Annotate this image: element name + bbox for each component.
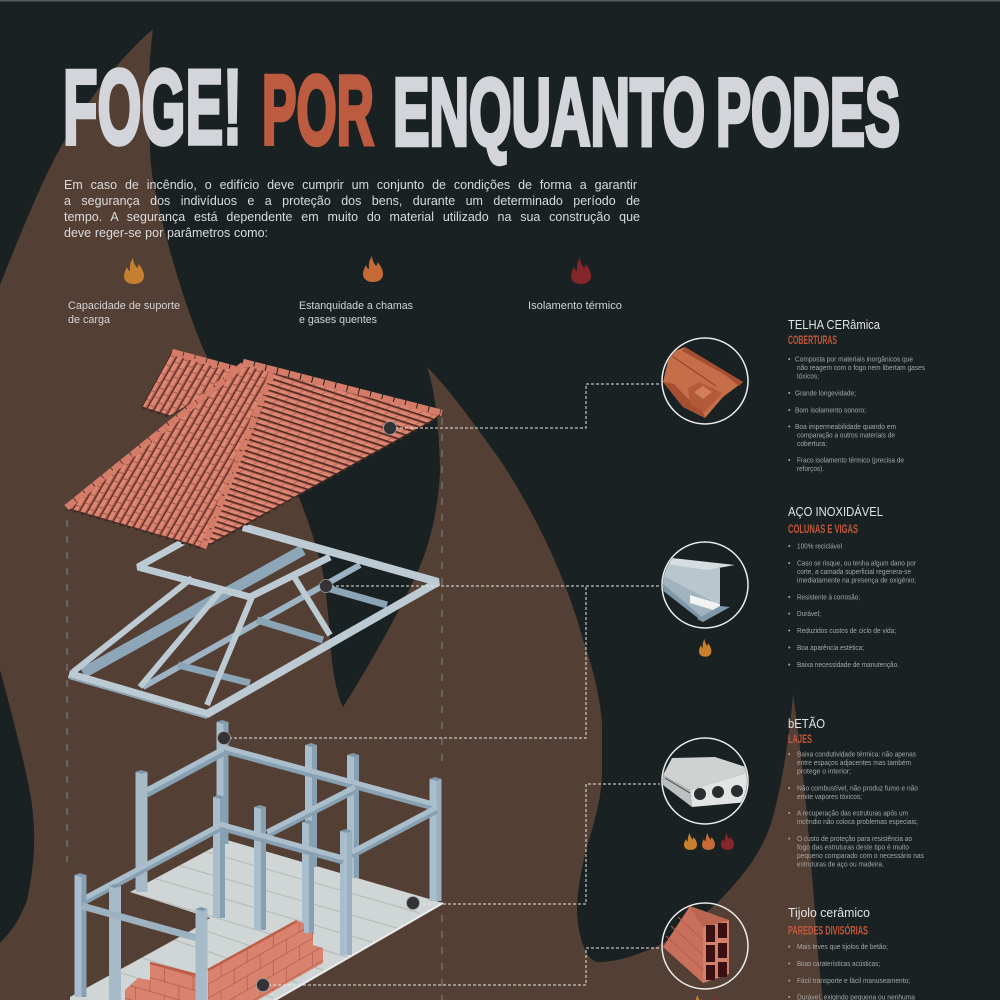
marker dots <box>218 422 420 992</box>
title <box>63 48 900 166</box>
bullet list: aco: 100% reciclável <box>797 544 842 550</box>
heading: tijolo: Tijolo cerâmico <box>788 905 870 920</box>
bullet list: telha: • <box>788 356 791 364</box>
middle steel beams <box>85 824 343 902</box>
bullet list: telha: comparação a outros materiais de <box>797 432 895 440</box>
icon: insulation flame <box>571 258 591 284</box>
bullet list: telha: Bom isolamento sonoro; <box>795 408 866 414</box>
bullet list: aco: Caso se risque, ou tenha algum dano por <box>797 560 917 568</box>
back steel beams <box>147 747 437 856</box>
bullet list: aco: • <box>788 645 791 652</box>
bullet list: telha: • <box>788 408 791 414</box>
frame: sloping legs <box>73 575 330 705</box>
bullet list: betao: incêndio não coloca problemas especiais; <box>797 819 918 826</box>
bullet list: betao <box>788 752 924 868</box>
icon: flame tightness flame <box>363 256 383 282</box>
bullet list: betao: protege o interior; <box>797 768 851 776</box>
circle: steel I-beam <box>660 542 748 628</box>
bullet list: aco: imediatamente na presença de oxigénio; <box>797 578 916 584</box>
connector lines <box>224 384 660 985</box>
bullet list: telha: não reagem com o fogo nem libertam gases <box>797 365 925 372</box>
guide lines: vertical dashes <box>67 418 442 1000</box>
bullet list: betao: Baixa condutividade térmica: não apenas <box>797 752 916 758</box>
brick wall: right face <box>208 921 323 1000</box>
circle: ceramic brick <box>662 903 748 989</box>
frame: upper rectangle <box>138 542 330 597</box>
bullet list: betao: emite vapores tóxicos; <box>797 794 862 801</box>
left rear column <box>136 770 148 892</box>
floor slab <box>70 840 443 1000</box>
subheading: lajes: LAJES <box>788 732 812 746</box>
icons: brick rating flames <box>692 995 722 1000</box>
bullet list: tijolo: • <box>788 961 791 968</box>
bullet list: betao: Não combustível, não produz fumo e não <box>797 786 918 792</box>
bullet list: betao: fogo das estruturas deste tipo é muito <box>797 844 909 852</box>
steel roof frame <box>69 527 438 718</box>
roof: eave teeth <box>66 408 433 549</box>
roof: left slope <box>66 362 272 548</box>
bullet list: aco: Boa aparência estética; <box>797 645 864 652</box>
caption: load capacity: de carga <box>68 314 111 326</box>
bullet list: aco: • <box>788 544 791 550</box>
bullet list: telha <box>788 356 925 473</box>
bullet list: aco: Baixa necessidade de manutenção. <box>797 662 899 669</box>
bullet list: telha: Grande longevidade; <box>795 390 856 398</box>
bullet list: aco: corte, a camada superficial regenera-se <box>797 569 911 576</box>
subheading: coberturas: COBERTURAS <box>788 333 837 347</box>
heading: telha: TELHA CERâmica <box>788 317 881 332</box>
caption: flame tightness: Estanquidade a chamas <box>299 300 413 312</box>
bullet list: telha: Fraco isolamento térmico (precisa de <box>797 458 904 464</box>
bullet list: telha: • <box>788 458 791 464</box>
bullet list: telha: reforços). <box>797 466 824 473</box>
caption: load capacity: Capacidade de suporte <box>68 300 180 312</box>
bullet list: tijolo: Fácil transporte e fácil manuseamento; <box>797 978 910 985</box>
frame: outer base <box>69 527 438 714</box>
icon: load flame <box>124 258 144 284</box>
bullet list: betao: • <box>788 786 791 792</box>
bullet list: tijolo: • <box>788 944 791 951</box>
roof: back slope <box>142 352 243 416</box>
title word: POR: POR <box>262 55 374 165</box>
front steel columns <box>74 873 208 1000</box>
bullet list: betao: O custo de proteção para resistência ao <box>797 836 912 843</box>
ceramic roof <box>66 352 442 549</box>
middle steel columns <box>213 795 352 955</box>
bullet list: tijolo <box>788 944 915 1000</box>
heading: aco: AÇO INOXIDÁVEL <box>788 504 883 519</box>
bullet list: betao: • <box>788 836 791 843</box>
back steel columns <box>216 720 442 901</box>
bullet list: telha: Composta por materiais inorgânicos que <box>795 356 913 364</box>
bullet list: aco: • <box>788 611 791 618</box>
intro paragraph: Em caso de incêndio, o edifício deve cumprir um conjunto de condições de forma a garantir <box>64 178 637 192</box>
bullet list: tijolo: Boas caraterísticas acústicas; <box>797 961 880 968</box>
bullet list: betao: • <box>788 810 791 818</box>
panel: telha ceramica <box>788 317 925 473</box>
bullet list: aco: • <box>788 628 791 635</box>
title word: FOGE!: FOGE! <box>63 48 242 166</box>
panel: betao <box>788 716 924 868</box>
roof: right slope <box>203 373 442 548</box>
circle: ceramic tile <box>662 338 748 424</box>
bullet list: telha: cobertura; <box>797 441 827 448</box>
intro paragraph: deve reger-se por parâmetros como: <box>64 226 268 240</box>
bullet list: aco: • <box>788 560 791 568</box>
heading: betao: bETÃO <box>788 716 825 731</box>
caption: flame tightness: e gases quentes <box>299 314 377 326</box>
circle: concrete slab <box>662 738 749 824</box>
brick wall: left face <box>125 963 197 1000</box>
intro paragraph <box>64 178 640 240</box>
bullet list: telha: Boa impermeabilidade quando em <box>795 424 896 431</box>
intro paragraph: a segurança dos indivíduos e a proteção dos bens, durante um determinado período de <box>64 194 640 208</box>
bullet list: tijolo: • <box>788 978 791 985</box>
icons: concrete rating flames <box>684 833 734 850</box>
bullet list: aco: Reduzidos custos de ciclo de vida; <box>797 628 896 635</box>
title word: ENQUANTO: ENQUANTO <box>393 59 705 166</box>
bullet list: aco: Durável; <box>797 611 821 618</box>
bullet list: aco: Resistente à corrosão; <box>797 594 860 602</box>
brick wall <box>125 921 323 1000</box>
icon: steel rating flame <box>699 639 711 657</box>
caption: thermal insulation: Isolamento térmico <box>528 300 622 312</box>
bullet list: betao: pequeno comparado com o necessário nas <box>797 853 924 860</box>
bullet list: telha: tóxicos; <box>797 374 819 380</box>
bullet list: tijolo: Mais leves que tijolos de betão; <box>797 944 888 951</box>
frame: darker braces <box>83 550 303 673</box>
bullet list: telha: • <box>788 390 791 398</box>
roof: ridge caps <box>66 352 442 548</box>
background flames <box>0 29 823 1000</box>
bullet list: telha: • <box>788 424 791 431</box>
subheading: paredes divisorias: PAREDES DIVISÓRIAS <box>788 922 868 938</box>
bullet list: aco: • <box>788 662 791 669</box>
bullet list: aco: • <box>788 594 791 602</box>
bullet list: betao: A recuperação das estruturas após um <box>797 810 908 818</box>
bullet list: betao: • <box>788 752 791 758</box>
bullet list: betao: estruturas de aço ou madeira. <box>797 862 884 868</box>
subheading: colunas e vigas: COLUNAS E VIGAS <box>788 522 858 536</box>
panel: aco inoxidavel <box>788 504 917 669</box>
bullet list: betao: entre espaços adjacentes mas também <box>797 760 911 767</box>
panel: tijolo ceramico <box>788 905 915 1000</box>
bullet list: aco <box>788 544 917 669</box>
intro paragraph: tempo. A segurança está dependente em muito do material utilizado na sua construção que <box>64 210 640 224</box>
